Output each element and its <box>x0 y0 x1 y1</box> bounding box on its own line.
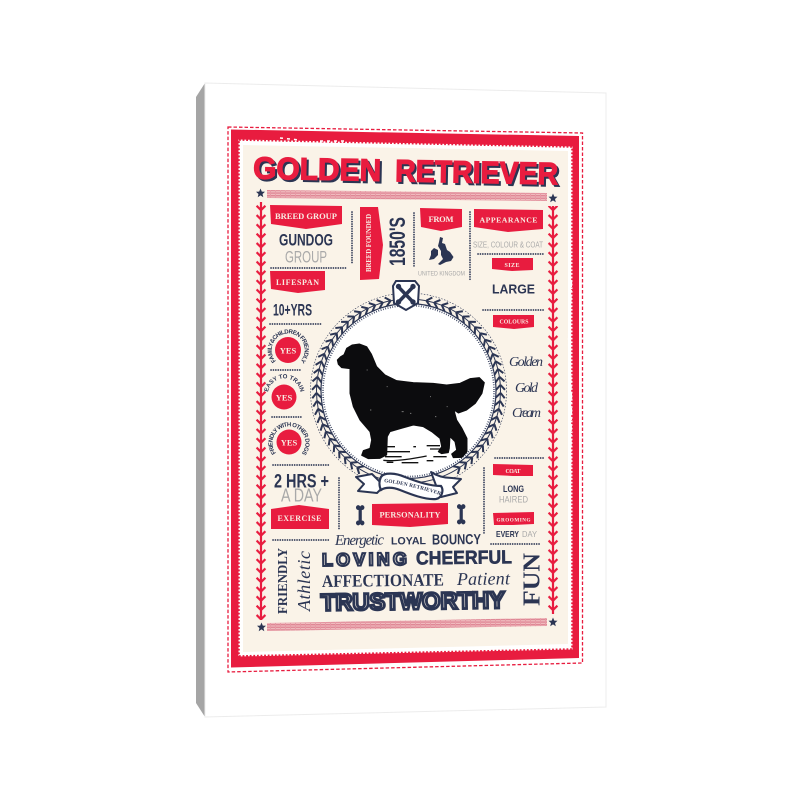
text: colour list <box>509 355 543 421</box>
panel: colours <box>493 315 543 421</box>
badge: family and children friendly: FAMILY&CHILDREN FRIENDLY <box>268 329 309 364</box>
text: gundog group <box>279 230 333 266</box>
icon: dog silhouette <box>337 344 484 463</box>
banner: colours: COLOURS <box>500 320 528 326</box>
title: RETRIEVER <box>397 155 560 193</box>
panel: from <box>418 208 465 278</box>
text: long haired <box>499 484 528 506</box>
badge: friendly with other dogs: FRIENDLY WITH OTHER DOGS <box>268 422 310 456</box>
word cloud: personality traits: LOYAL <box>391 535 427 547</box>
text: 2 hrs a day: A DAY <box>281 486 322 506</box>
badge: easy to train: YES <box>276 392 293 402</box>
title: GOLDEN <box>255 153 383 190</box>
word cloud: personality traits: Patient <box>456 568 511 589</box>
word cloud: personality traits: CHEERFUL <box>416 547 512 569</box>
text: large: LARGE <box>492 282 535 296</box>
banner: grooming: GROOMING <box>496 518 530 524</box>
text: 10+ yrs: 10+YRS <box>273 302 312 320</box>
word cloud: personality traits: BOUNCY <box>432 532 481 548</box>
icon: bone right <box>457 504 465 524</box>
text: long haired: LONG <box>503 484 524 495</box>
panel: grooming <box>493 512 537 539</box>
badge: easy to train <box>264 374 304 410</box>
text: long haired: HAIRED <box>499 494 528 506</box>
bottom hatched band with stars <box>257 618 558 631</box>
word cloud: personality traits: TRUSTWORTHY <box>321 587 505 615</box>
word cloud: personality traits: AFFECTIONATE <box>322 570 444 591</box>
panel: exercise <box>271 470 329 529</box>
word cloud: personality traits: FUN <box>520 552 546 606</box>
panel: lifespan <box>270 271 325 320</box>
poster frame <box>228 127 582 672</box>
banner: coat: COAT <box>506 469 521 475</box>
title: RETRIEVER <box>395 153 558 191</box>
banner: lifespan: LIFESPAN <box>276 278 319 287</box>
panel: personality <box>356 503 465 527</box>
word cloud: personality traits <box>276 532 546 615</box>
text: size colour coat: SIZE, COLOUR & COAT <box>473 240 543 250</box>
panel: appearance <box>473 209 543 250</box>
word cloud: personality traits: LOVING <box>322 549 407 570</box>
word cloud: personality traits: FRIENDLY <box>276 548 291 614</box>
left chevron column <box>255 202 267 620</box>
text: 2 hrs a day <box>274 470 329 506</box>
icon: bone left <box>356 505 364 525</box>
text: colour list: Golden <box>509 355 543 370</box>
panel: breed group <box>270 205 342 266</box>
banner: exercise: EXERCISE <box>278 514 322 523</box>
panel: breed founded <box>360 207 410 280</box>
text: 2 hrs a day: 2 HRS + <box>274 470 329 492</box>
panel: coat <box>493 464 533 506</box>
right chevron column <box>547 206 559 614</box>
banner: from: FROM <box>428 214 454 224</box>
title <box>253 151 560 193</box>
banner: appearance: APPEARANCE <box>480 216 538 224</box>
panel: size <box>492 258 535 296</box>
banner: breed founded: BREED FOUNDED <box>366 214 373 272</box>
icon: uk map <box>429 237 454 265</box>
badge: easy to train: EASY TO TRAIN <box>264 374 304 392</box>
emblem: laurel wreath <box>310 293 506 489</box>
text: gundog group: GUNDOG <box>279 230 333 250</box>
text: united kingdom: UNITED KINGDOM <box>418 272 465 278</box>
badge: family and children friendly: YES <box>280 346 297 356</box>
text: every day <box>496 529 537 539</box>
text: colour list: Gold <box>515 381 539 396</box>
badge: friendly with other dogs: YES <box>281 438 298 448</box>
icon: crest shield <box>393 281 419 310</box>
text: every day: DAY <box>522 529 537 539</box>
word cloud: personality traits: Athletic <box>294 551 314 612</box>
text: gundog group: GROUP <box>285 248 327 266</box>
title: GOLDEN <box>253 151 382 188</box>
text: 1850's: 1850'S <box>385 217 410 266</box>
ribbon: golden retriever: GOLDEN RETRIEVER <box>384 478 441 495</box>
canvas: wrapped print <box>196 83 606 717</box>
top hatched band with stars <box>256 188 558 202</box>
word cloud: personality traits: Energetic <box>334 532 384 549</box>
text: colour list: Cream <box>512 406 541 421</box>
banner: personality: PERSONALITY <box>380 510 440 520</box>
banner: breed group: BREED GROUP <box>275 211 337 221</box>
text: every day: EVERY <box>496 529 519 539</box>
banner: size: SIZE <box>504 263 520 269</box>
ribbon: golden retriever <box>355 471 462 500</box>
